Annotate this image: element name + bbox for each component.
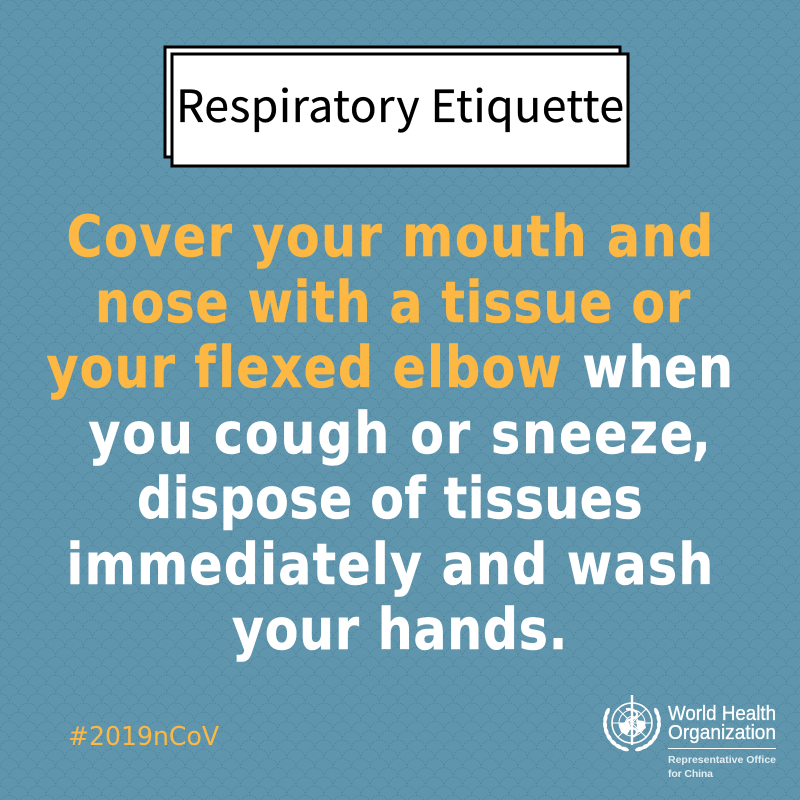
title box	[165, 47, 628, 166]
main message: Cover your mouth and	[66, 203, 713, 270]
main message: nose with a tissue or	[95, 269, 691, 336]
title text: Respiratory Etiquette	[176, 70, 624, 135]
icon: WHO emblem	[603, 695, 661, 752]
main message	[46, 203, 733, 663]
main message: when	[582, 334, 733, 401]
main message: ,	[692, 400, 711, 467]
hashtag: #2019nCoV	[68, 722, 219, 752]
main message: dispose of tissues	[137, 465, 643, 532]
main message: you cough or sneeze	[88, 400, 693, 467]
WHO logo: for China	[668, 768, 713, 780]
main message: immediately and wash	[66, 531, 713, 598]
main message: your f‌lexed elbow	[46, 334, 562, 401]
organization name: World Health	[668, 702, 776, 725]
WHO logo	[603, 695, 776, 780]
office name: Representative Office	[668, 754, 776, 766]
WHO logo: Organization	[668, 721, 776, 744]
main message: your hands.	[232, 596, 567, 663]
